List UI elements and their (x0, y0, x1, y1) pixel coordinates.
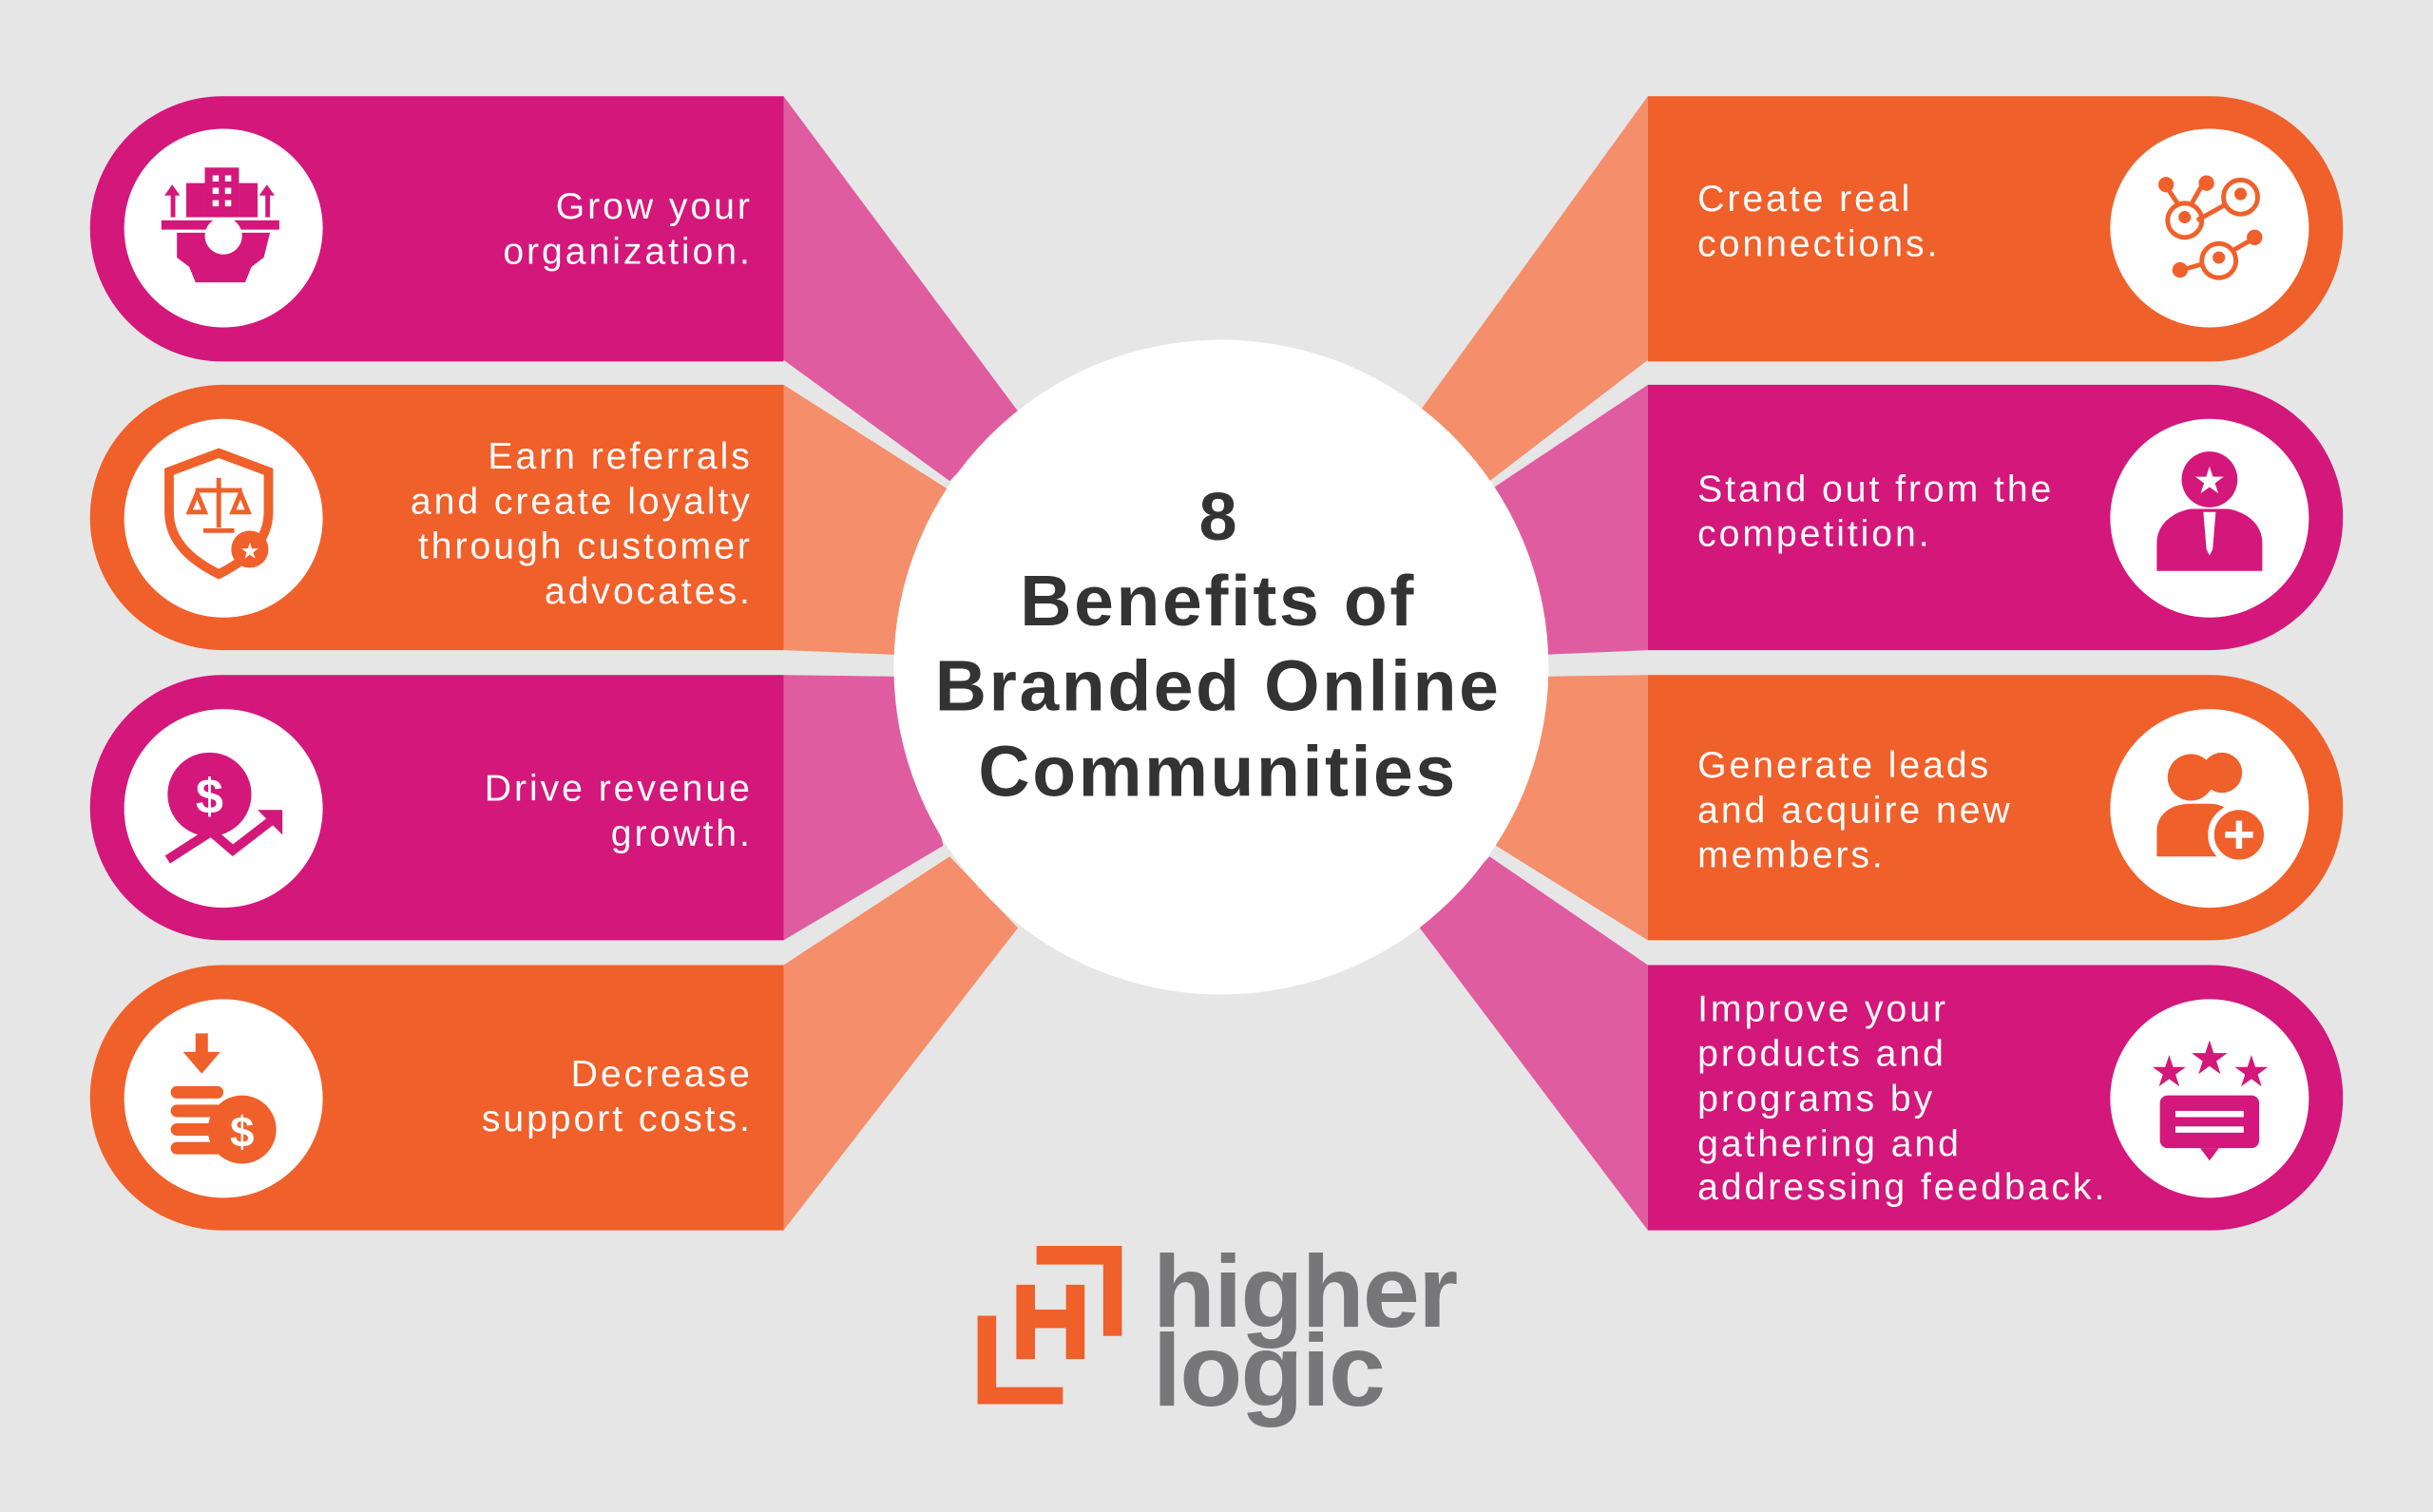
icon: rating feedback: ★ (2150, 1047, 2189, 1096)
icon: shield scales: ★ (240, 539, 259, 564)
panel: drive revenue (90, 675, 783, 940)
panel: earn referrals (90, 385, 783, 650)
logo: higher (1153, 1234, 1457, 1349)
icon: network (2166, 180, 2257, 278)
panel: generate leads (1648, 675, 2343, 940)
panel: improve products: Improve your (1697, 988, 1948, 1029)
icon: rating feedback: ★ (2189, 1033, 2231, 1084)
panel: stand out: competition. (1697, 514, 1932, 555)
logo: logic (1153, 1312, 1384, 1427)
panel: create connections: connections. (1697, 223, 1940, 264)
panel: stand out: Stand out from the (1697, 469, 2054, 509)
panel: generate leads: Generate leads (1697, 745, 1991, 786)
icon: rating feedback: ★ (2232, 1047, 2270, 1096)
icon: dollar growth (167, 753, 282, 859)
panel: grow organization (90, 96, 783, 361)
wedges right (1420, 96, 1648, 1231)
icon: person star (2156, 451, 2262, 571)
panel: create connections: Create real (1697, 179, 1912, 220)
wedges left (783, 96, 1018, 1231)
panel: drive revenue: growth. (611, 813, 753, 854)
panel: drive revenue: Drive revenue (485, 768, 753, 809)
title circle: Benefits of (1020, 561, 1416, 641)
logo (978, 1234, 1457, 1427)
panel: decrease costs (90, 965, 783, 1231)
icon: coins (171, 1033, 277, 1163)
panel: decrease costs: Decrease (571, 1054, 753, 1095)
icon: dollar growth: $ (196, 769, 223, 824)
panel: stand out (1648, 385, 2343, 650)
icon: add user (2156, 753, 2267, 863)
panel: earn referrals: advocates. (545, 571, 753, 612)
panel: improve products: addressing feedback. (1697, 1167, 2107, 1208)
panel: earn referrals: through customer (418, 526, 753, 567)
panel: improve products: products and (1697, 1034, 1946, 1075)
panel: earn referrals: Earn referrals (488, 436, 753, 477)
panel: generate leads: and acquire new (1697, 790, 2013, 831)
panel: grow organization: organization. (503, 232, 753, 273)
panel: generate leads: members. (1697, 835, 1886, 876)
icon: rating feedback (2150, 1033, 2270, 1160)
icon: building gear (162, 167, 279, 282)
icon: person star: ★ (2193, 461, 2226, 502)
title circle: Communities (978, 732, 1458, 812)
title circle (893, 340, 1548, 995)
title circle: 8 (1199, 479, 1237, 555)
panel: earn referrals: and create loyalty (411, 481, 753, 522)
panel: improve products: programs by (1697, 1079, 1935, 1120)
icon: shield scales (169, 453, 268, 574)
panel: improve products (1648, 965, 2343, 1231)
title circle: Branded Online (935, 646, 1501, 726)
panel: decrease costs: support costs. (482, 1099, 753, 1139)
panel: improve products: gathering and (1697, 1123, 1962, 1164)
panel: create connections (1648, 96, 2343, 361)
icon: coins: $ (230, 1108, 254, 1157)
panel: grow organization: Grow your (556, 186, 753, 227)
